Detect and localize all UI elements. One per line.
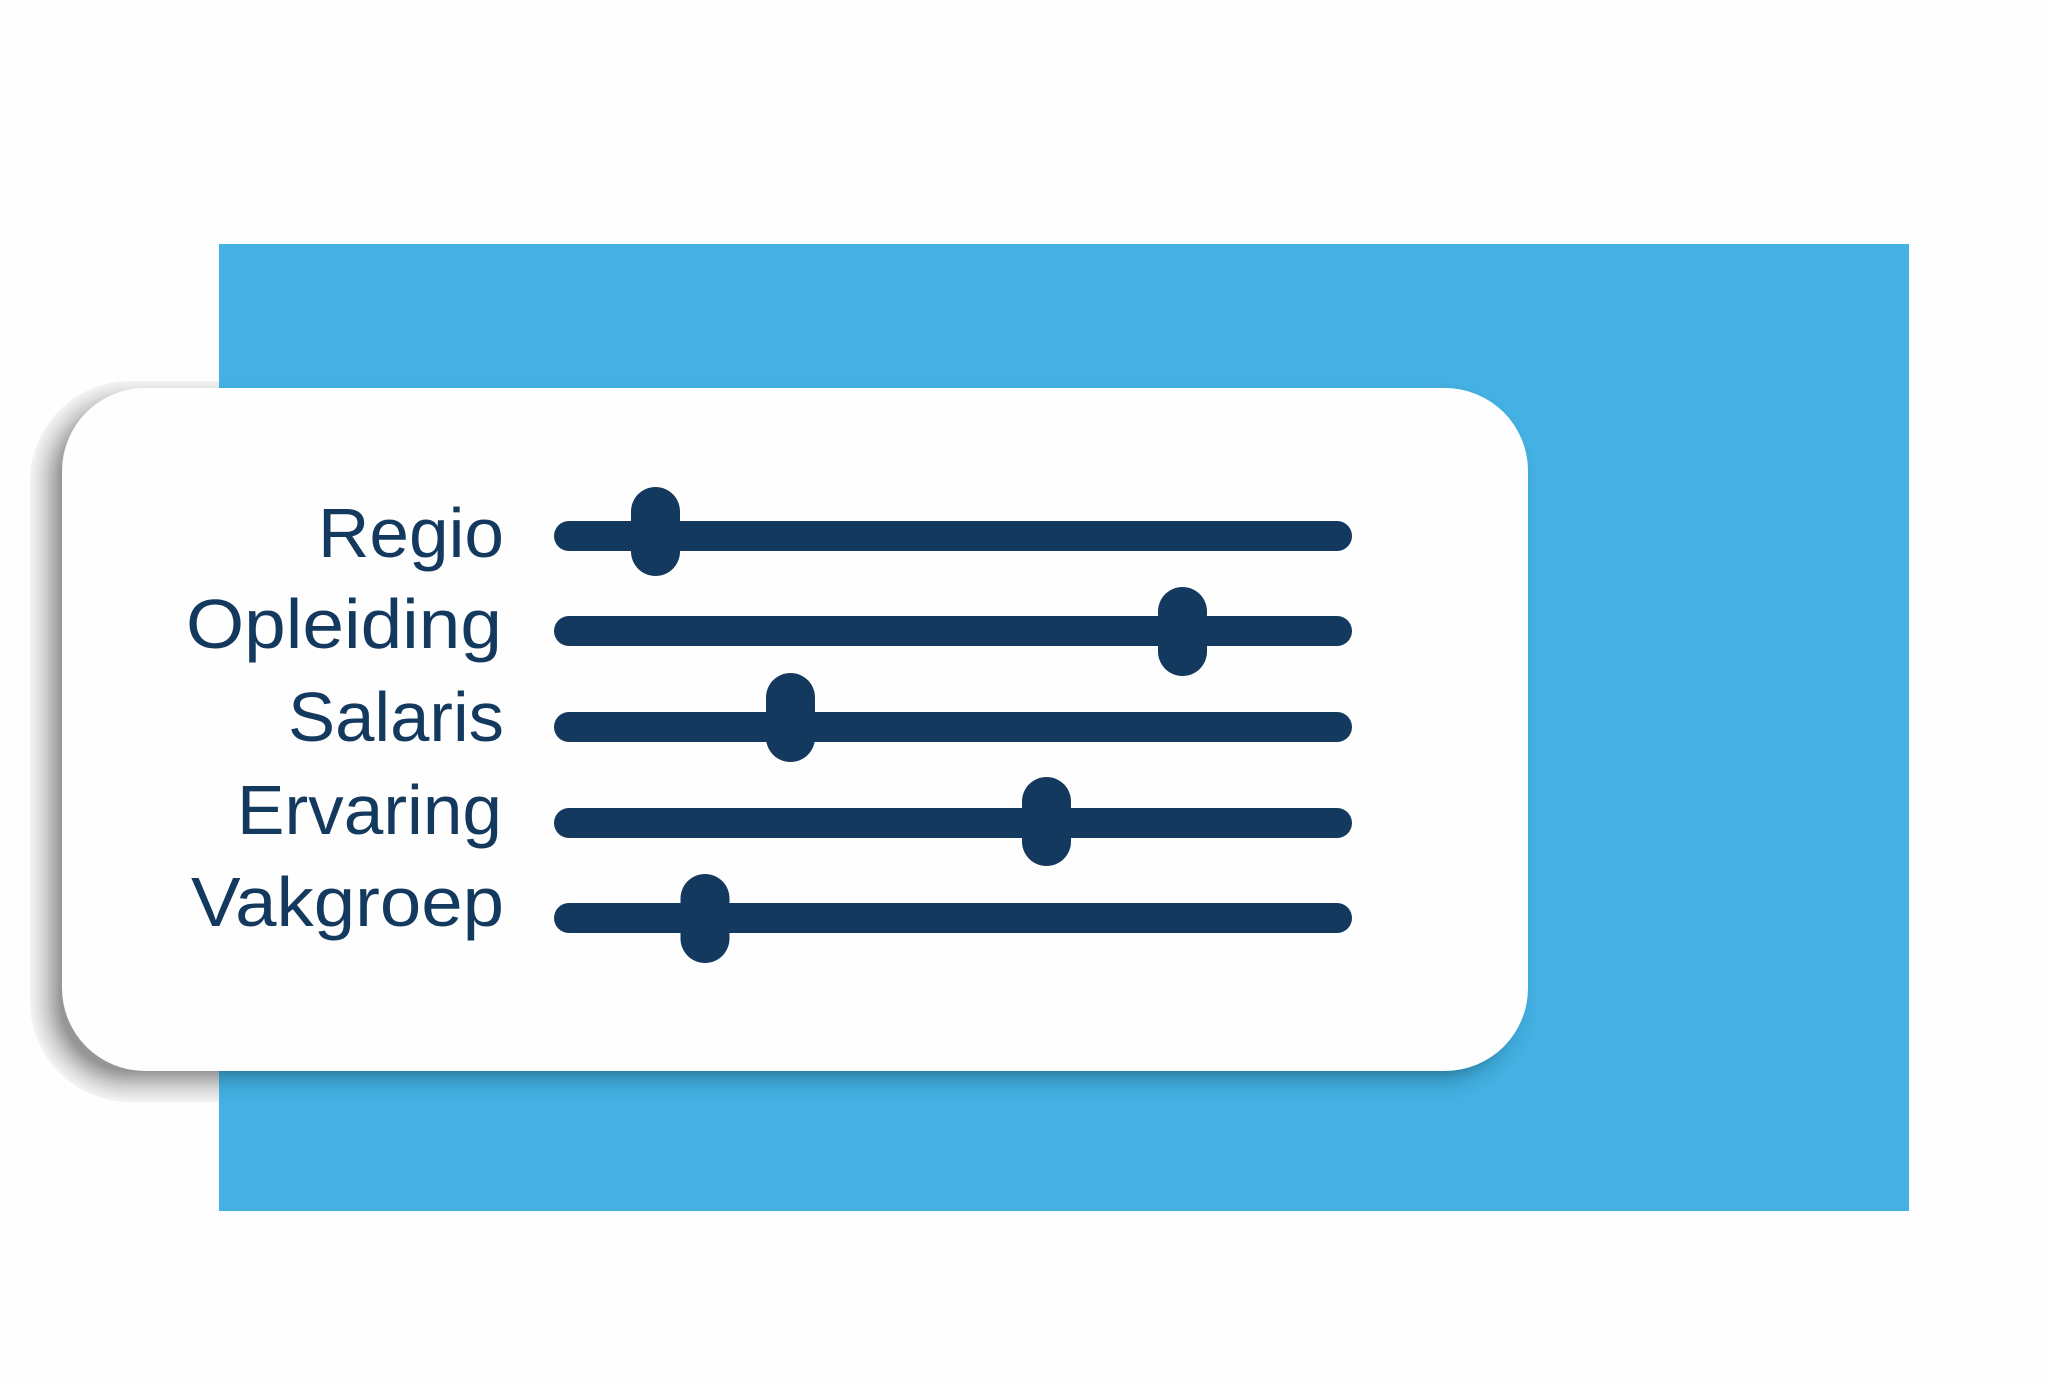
slider row: Ervaring — [237, 771, 1352, 866]
white panel — [62, 388, 1528, 1071]
panel drop shadow on blue — [219, 1010, 1526, 1090]
blue background block — [219, 244, 1909, 1211]
panel drop shadow on white — [30, 381, 219, 1102]
knob: Ervaring — [1022, 777, 1071, 866]
slider row: Vakgroep — [191, 863, 1352, 963]
knob: Vakgroep — [680, 874, 730, 963]
knob: Regio — [631, 487, 680, 576]
track: Opleiding — [554, 616, 1352, 646]
slider row: Salaris — [288, 673, 1352, 762]
label: Salaris: Salaris — [288, 678, 504, 756]
track: Regio — [554, 521, 1352, 551]
track: Vakgroep — [554, 903, 1352, 933]
label: Regio: Regio — [318, 494, 504, 572]
label: Ervaring: Ervaring — [237, 771, 502, 849]
slider row: Opleiding — [186, 585, 1352, 676]
knob: Opleiding — [1158, 587, 1207, 676]
track: Ervaring — [554, 808, 1352, 838]
slider row: Regio — [318, 487, 1352, 576]
label: Opleiding: Opleiding — [186, 585, 502, 663]
track: Salaris — [554, 712, 1352, 742]
knob: Salaris — [766, 673, 815, 762]
label: Vakgroep: Vakgroep — [191, 863, 504, 941]
